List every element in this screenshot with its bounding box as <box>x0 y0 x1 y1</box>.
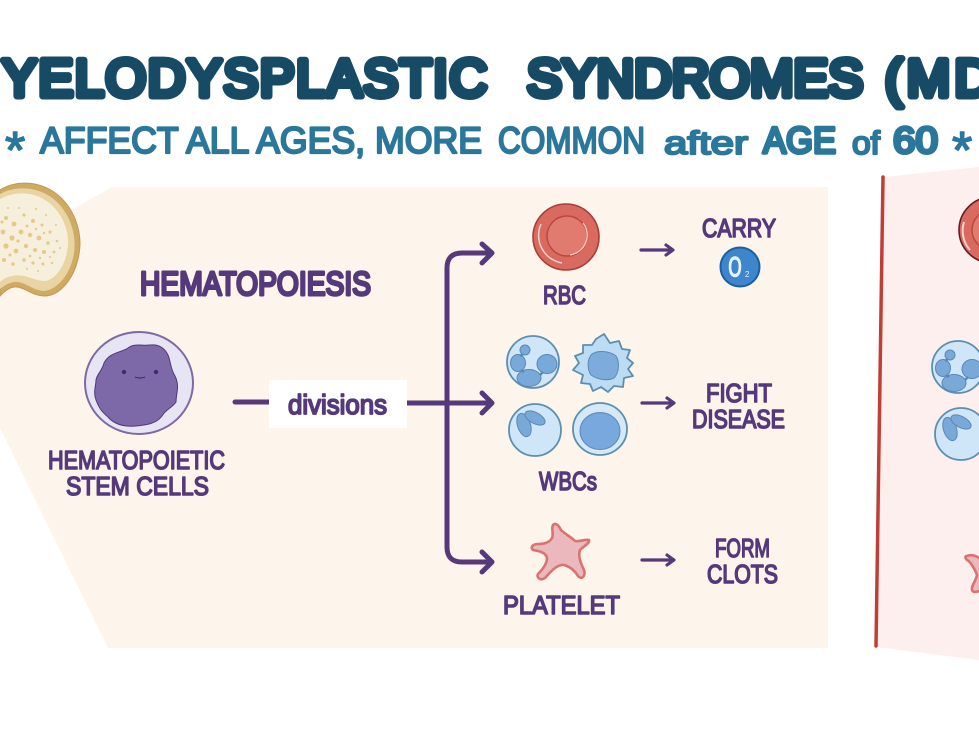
label: hematopoietic stem cells <box>48 445 225 501</box>
subtitle: AGE <box>763 120 836 161</box>
icon: platelet right <box>966 555 979 592</box>
icon: spiky monocyte <box>573 334 633 392</box>
icon: eosinophil <box>509 404 561 456</box>
icon: abnormal red blood cell <box>959 197 979 263</box>
label: divisions: divisions <box>288 389 387 420</box>
icon: platelet <box>532 524 589 579</box>
icon: bone cross-section <box>0 183 80 296</box>
panel: hematopoiesis <box>0 187 828 648</box>
label: hematopoietic stem cells: HEMATOPOIETIC <box>48 445 225 475</box>
label: divisions <box>269 380 407 428</box>
icon: stem cell <box>85 332 193 434</box>
label: fight disease: FIGHT <box>706 378 772 408</box>
icon: oxygen molecule: O <box>728 251 742 284</box>
subtitle: * <box>952 122 972 180</box>
icon: neutrophil right <box>932 341 979 393</box>
subtitle: after <box>664 125 748 161</box>
label: platelet: PLATELET <box>503 590 620 620</box>
label: form clots <box>707 533 778 589</box>
subtitle: AFFECT ALL AGES, MORE <box>40 120 482 161</box>
label: fight disease: DISEASE <box>692 404 785 434</box>
label: RBC: RBC <box>543 280 586 310</box>
icon: oxygen molecule: 2 <box>745 270 750 279</box>
arrow: WBC function <box>642 398 674 408</box>
label: WBCs: WBCs <box>539 466 597 496</box>
arrow: RBC function <box>641 245 673 255</box>
heading: hematopoiesis: HEMATOPOIESIS <box>140 265 371 302</box>
title: SYNDROMES <box>527 50 863 108</box>
arrow: platelet function <box>642 555 674 565</box>
red divider line <box>876 177 883 646</box>
subtitle: * <box>5 122 25 180</box>
subtitle <box>5 120 972 180</box>
icon: red blood cell <box>533 204 599 270</box>
subtitle: 60 <box>893 120 938 161</box>
arrow: branching from stem cells <box>235 244 492 572</box>
title <box>0 50 979 108</box>
label: form clots: FORM <box>715 533 770 563</box>
label: form clots: CLOTS <box>707 559 778 589</box>
label: fight disease <box>692 378 785 434</box>
icon: oxygen molecule <box>720 248 760 286</box>
subtitle: COMMON <box>498 120 645 161</box>
label: hematopoietic stem cells: STEM CELLS <box>66 471 209 501</box>
icon: neutrophil <box>507 336 559 388</box>
label: carry: CARRY <box>702 213 776 243</box>
icon: eosinophil right <box>935 408 979 460</box>
icon: lymphocyte <box>573 403 627 455</box>
panel: myelodysplastic side <box>876 167 979 660</box>
subtitle: of <box>852 125 880 161</box>
